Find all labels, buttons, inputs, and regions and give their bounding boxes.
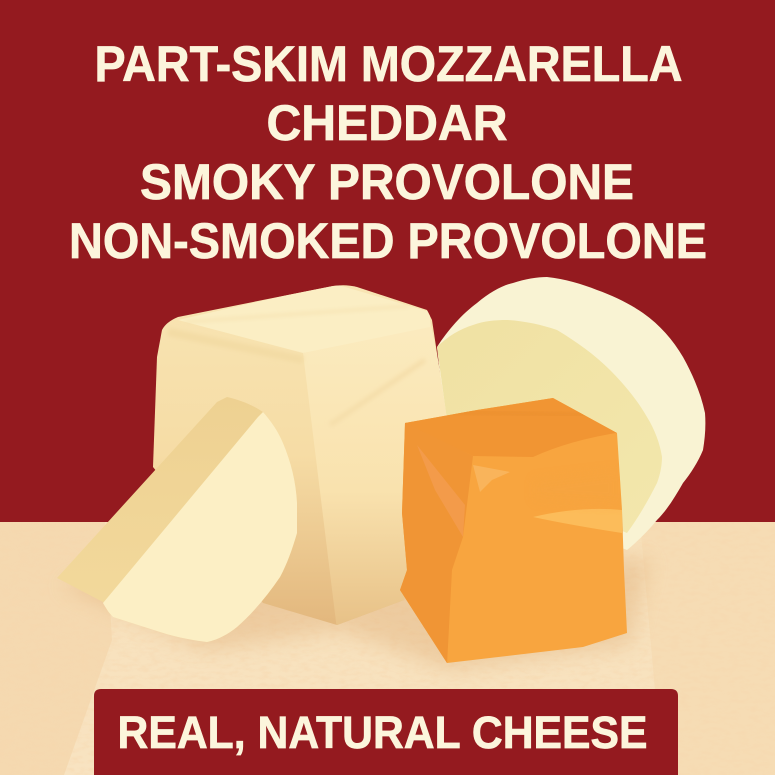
title: cheese list: NON-SMOKED PROVOLONE <box>69 213 707 269</box>
right face of block <box>303 320 450 630</box>
wooden table surface <box>0 522 775 775</box>
cheese shadows on table <box>60 530 650 670</box>
badge: real, natural cheese: REAL, NATURAL CHEESE <box>118 707 648 758</box>
title: cheese list: PART-SKIM MOZZARELLA <box>94 36 682 92</box>
left face of cheddar <box>396 420 473 665</box>
cheese: large mozzarella block <box>150 280 450 630</box>
cut face of wedge <box>103 412 297 642</box>
cheese: round provolone <box>437 277 705 550</box>
cheese: orange cheddar block <box>395 395 635 670</box>
title: cheese list <box>69 36 707 269</box>
top face of block <box>178 284 430 353</box>
title: cheese list: CHEDDAR <box>266 95 508 151</box>
top face of cheddar <box>400 395 622 457</box>
badge: real, natural cheese <box>94 689 678 775</box>
title: cheese list: SMOKY PROVOLONE <box>140 154 634 210</box>
cheese: half-moon wedge <box>57 397 297 642</box>
